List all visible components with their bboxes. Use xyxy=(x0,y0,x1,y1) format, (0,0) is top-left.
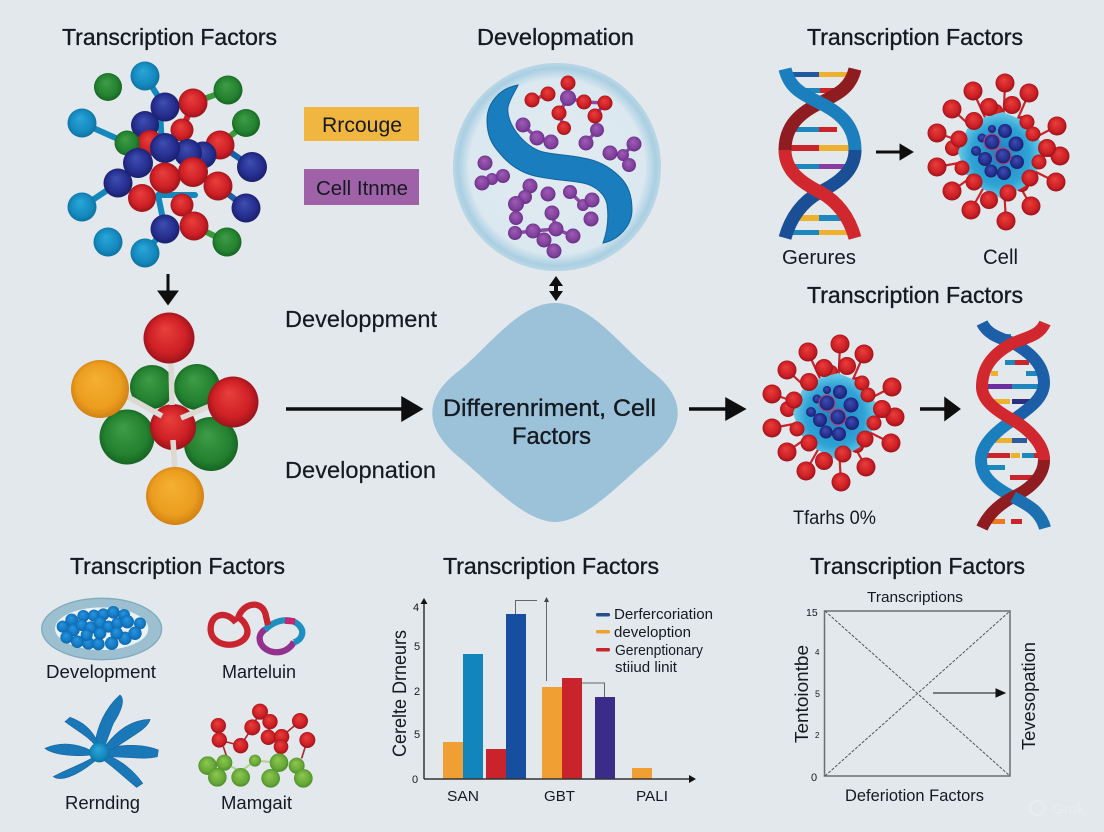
chart annotation brackets xyxy=(516,600,604,697)
title: bottom left: Transcription Factors xyxy=(70,553,285,579)
chart y tick labels: 2 xyxy=(414,686,420,698)
icon: blue star shaped cell xyxy=(45,695,158,787)
icon: cell with red receptors lower xyxy=(762,334,904,492)
label: Developnation: Developnation xyxy=(285,457,436,483)
cross chart y ticks: 4 xyxy=(815,648,820,657)
cross chart diagonals xyxy=(825,611,1010,776)
arrow: blob to cell xyxy=(689,400,743,418)
centre shape: differentiation blob: Differenriment, Cell xyxy=(443,395,656,422)
arrow: cell to helix xyxy=(920,400,958,418)
legend box: Cell Itnme xyxy=(304,169,419,205)
label: Developpment: Developpment xyxy=(285,306,437,332)
icon: cell sphere with S band and purple chains xyxy=(454,64,660,270)
chart annotation arrowhead xyxy=(544,597,549,602)
icon: linked chain rings xyxy=(211,605,302,652)
cross chart right label: Tevesopation xyxy=(1019,642,1039,750)
chart legend: Gerenptionary xyxy=(615,643,704,659)
title: bottom centre: Transcription Factors xyxy=(443,553,659,579)
label: Gerures: Gerures xyxy=(782,246,856,269)
cross chart x label: Deferiotion Factors xyxy=(845,787,984,805)
chart legend xyxy=(596,606,713,676)
legend box: Cell Itnme: Cell Itnme xyxy=(316,177,408,200)
cross chart left label: Tentoiontbe xyxy=(791,645,812,743)
title: top right: Transcription Factors xyxy=(807,24,1023,50)
chart y tick labels: 4 xyxy=(413,602,419,614)
chart bars xyxy=(443,614,652,779)
cross chart y ticks: 2 xyxy=(815,731,820,740)
label: Tfarhs 0%: Tfarhs 0% xyxy=(793,507,876,529)
cross chart y ticks xyxy=(806,607,820,784)
bar chart xyxy=(390,597,713,805)
chart axes xyxy=(424,603,690,779)
arrow: double vertical xyxy=(549,276,563,301)
watermark: Grok xyxy=(1052,801,1085,818)
chart legend: stiiud linit xyxy=(615,659,678,676)
cross chart y ticks: 0 xyxy=(811,772,817,784)
chart y tick labels xyxy=(412,602,420,786)
chart x labels: SAN xyxy=(447,788,479,805)
chart y tick labels: 5 xyxy=(414,641,420,653)
title: middle right: Transcription Factors xyxy=(807,282,1023,308)
icon: cell with red receptors top xyxy=(928,74,1070,230)
chart x labels: PALI xyxy=(636,788,668,805)
title: top left: Transcription Factors xyxy=(62,24,277,50)
icon: DNA helix top xyxy=(785,69,855,238)
title: bottom right: Transcription Factors xyxy=(810,553,1025,579)
arrow: molecule to blob xyxy=(286,399,420,419)
legend box: Rrcouge: Rrcouge xyxy=(322,114,402,137)
label: Cell: Cell xyxy=(983,246,1018,269)
label: Development: Development xyxy=(46,661,156,682)
cross chart xyxy=(791,589,1039,805)
label: Rernding: Rernding xyxy=(65,792,140,813)
centre shape: differentiation blob: Factors xyxy=(512,423,591,450)
cross chart arrow xyxy=(933,689,1005,697)
centre shape: differentiation blob xyxy=(432,303,678,522)
label: Marteluin: Marteluin xyxy=(222,661,296,682)
chart axis arrowheads xyxy=(420,598,696,783)
chart x labels: GBT xyxy=(544,788,575,805)
label: Mamgait: Mamgait xyxy=(221,792,292,813)
chart y tick labels: 5 xyxy=(414,729,420,741)
chart y tick labels: 0 xyxy=(412,774,418,786)
cross chart frame xyxy=(824,611,1010,776)
cross chart y ticks: 5 xyxy=(815,689,820,699)
icon: petri dish with blue cells xyxy=(42,598,162,660)
icon: red and green ball network xyxy=(198,704,315,788)
watermark xyxy=(1030,801,1085,818)
chart x labels xyxy=(447,788,668,805)
cross chart top label: Transcriptions xyxy=(867,589,963,606)
title: top centre: Developmation xyxy=(477,24,634,50)
arrow: helix to cell xyxy=(876,146,911,158)
icon: large molecule xyxy=(71,312,258,525)
legend box: Rrcouge xyxy=(304,107,419,141)
chart legend: Derfercoriation xyxy=(614,606,713,623)
icon: DNA helix lower xyxy=(981,323,1045,528)
chart y axis label: Cerelte Drneurs xyxy=(390,630,411,757)
arrow: molecule down xyxy=(160,274,176,303)
cross chart y ticks: 15 xyxy=(806,607,818,619)
chart legend: develoption xyxy=(614,624,691,641)
icon: ball and stick molecule cluster xyxy=(68,62,267,268)
